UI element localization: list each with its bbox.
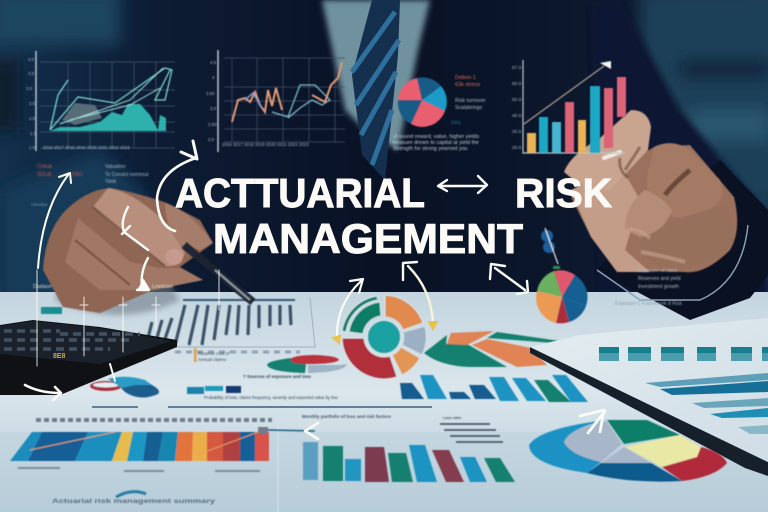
chart: top pie with notes: 63k stress (455, 82, 480, 88)
overlay small text on dark area: TRO (71, 172, 83, 178)
report: bottom column chart: Loss ratio (443, 416, 462, 420)
chart: top pie with notes (392, 75, 486, 152)
overlay small text on dark area: SDUE (37, 172, 53, 178)
flat ellipse pie chart on report (267, 355, 347, 373)
chart: teal line and area chart: 2.0 (29, 116, 36, 121)
small annotations near calculator: Reserve cost of (198, 351, 230, 356)
overlay small text on dark area: Chksk (37, 164, 53, 170)
tick on small pie (110, 364, 115, 381)
chart: orange and blue line chart: 2.0 (208, 137, 215, 142)
large donut pie chart, lower right (529, 420, 727, 482)
report: bottom column chart (302, 414, 515, 482)
curled middle finger (647, 143, 723, 218)
small annotations near calculator: Probability of loss, claims frequency, severity and expected value by line (204, 395, 338, 400)
chart: orange and blue line chart: 3.0 (210, 106, 217, 111)
overlay small text on dark area: To Convict nominus (105, 172, 149, 178)
chart: top-right bar chart with trend arrow: 30.0 (512, 129, 522, 135)
arrow: across hand (122, 207, 148, 250)
arrow: big curve to title (157, 141, 197, 231)
arrow: curve from title to donut (403, 262, 433, 325)
arrow: lower left (25, 385, 61, 400)
background: dark suit and blurred office (0, 0, 768, 300)
small annotations near calculator (41, 307, 338, 400)
arrow tip marker: donut left (333, 336, 340, 343)
thumb (165, 203, 213, 250)
overlay small text on dark area: Investment growth (638, 284, 679, 290)
overlay small text on dark area: Exposure of rates (638, 268, 678, 274)
chart: orange and blue line chart: 4 (212, 75, 215, 80)
overlay small text on dark area: Reserves and yield (638, 276, 681, 282)
report: bottom column chart: Monthly portfolio of loss and risk factors (302, 414, 392, 419)
arrow: left rising curve (38, 173, 71, 268)
chart: teal line and area chart: 3.0 (26, 86, 33, 91)
palm and knuckles (43, 188, 213, 313)
chart: orange and blue line chart: 2016 2017 2018 2019 2020 2021 2022 2023 (222, 142, 309, 147)
desk with printed reports (0, 285, 768, 512)
overlay small text on dark area: Valuation (105, 164, 126, 170)
left hand holding pen (43, 188, 253, 313)
overlay small text on dark area: Uhodsn (31, 202, 48, 208)
chart: top pie with notes: data (451, 120, 461, 126)
report: wide multi-colour strip chart (10, 420, 315, 505)
title line 1: ACTTUARIAL (175, 170, 425, 216)
overlay small text on dark area (31, 164, 682, 307)
guide lines with ticks (37, 270, 219, 366)
footer caption: Actuarial risk management summary (52, 499, 216, 505)
chart: top-right bar chart with trend arrow: 60.0 (512, 81, 522, 87)
chart: top-right bar chart with trend arrow (512, 60, 626, 153)
chart: top-right bar chart with trend arrow: 20.0 (512, 145, 522, 151)
report: orange and green wedge chart (424, 331, 567, 367)
overlay small text on dark area: Daataon (33, 284, 52, 290)
report: middle column chart (400, 375, 588, 402)
suit sleeve and cuff, right (596, 160, 768, 320)
arrow: strip chart pointer (305, 423, 318, 439)
chart: top pie with notes: Risk turnover (455, 98, 486, 104)
chart: teal line and area chart: 1.5 (30, 131, 37, 136)
chart: teal line and area chart (26, 51, 175, 151)
chart: teal line and area chart: 1.0 (29, 145, 36, 150)
shirt and tie (322, 0, 430, 180)
chart: teal line and area chart: 2.5 (29, 101, 36, 106)
right hand pointing (564, 110, 737, 272)
title line 2: MANAGEMENT (213, 215, 523, 262)
arrow: up to title from donut (337, 279, 363, 337)
chart: teal line and area chart: 4.0 (28, 57, 35, 62)
arrow: short downward (137, 258, 149, 290)
chart: top pie with notes: Strength for strong yearned you (393, 146, 468, 152)
title: Actuarial Risk Management (175, 170, 612, 262)
chart: top-right bar chart with trend arrow: 67.0 (512, 65, 522, 71)
donut chart, centre (342, 295, 426, 379)
tablet with report (530, 318, 768, 476)
chart: orange and blue line chart: 2.50 (208, 122, 217, 127)
calculator display digit: 8E8 (53, 353, 66, 360)
overlay small text on dark area: Exposure 1 Framework 8 Risk (615, 301, 682, 307)
chart: top pie with notes: Scalabrings (455, 105, 483, 111)
chart: teal line and area chart: 2016 2017 2018 2019 2020 2021 2022 2023 (43, 145, 130, 150)
chart: orange and blue line chart (206, 50, 345, 152)
pen (184, 245, 253, 302)
arrow tip marker: donut right (429, 322, 437, 329)
floating pie chart, centre right (536, 228, 588, 323)
index finger (564, 110, 651, 191)
curled ring finger (625, 190, 672, 237)
chart: top pie with notes: Debon 1 (455, 75, 476, 81)
fingernail highlight (604, 152, 620, 158)
chart: orange and blue line chart: 4.5 (210, 60, 217, 65)
chart: teal line and area chart: 3.5 (28, 71, 35, 76)
report: striped column chart (146, 300, 300, 352)
back of hand and curled fingers (571, 145, 737, 272)
arrow: to large pie (580, 410, 605, 433)
first finger (93, 188, 185, 266)
chart: orange and blue line chart: 3.50 (206, 91, 215, 96)
small annotations near calculator: Annual claims (198, 357, 227, 362)
arrow: title double arrow (438, 176, 487, 193)
palm highlight (571, 165, 650, 272)
small 3D pie chart on report (90, 377, 159, 398)
small annotations near calculator: ? Sources of exposure and loss (243, 374, 312, 379)
chart: top-right bar chart with trend arrow: 50.0 (512, 97, 522, 103)
calculator (0, 320, 177, 395)
second finger (65, 218, 203, 290)
title word risk: RISK (515, 170, 612, 216)
overlay small text on dark area: Yield (105, 179, 116, 185)
bright white annotation arrows and guide lines (25, 141, 605, 439)
chart: top-right bar chart with trend arrow: 40.0 (512, 113, 522, 119)
chart: top pie with notes: A sound reward, value, higher yields (394, 134, 479, 140)
arrow: double headed to floating pie (490, 264, 528, 294)
overlay small text on dark area: Lowdown (152, 284, 173, 290)
curled little finger (640, 205, 734, 269)
chart: top pie with notes: measure dream to capital at yield the (392, 140, 479, 146)
